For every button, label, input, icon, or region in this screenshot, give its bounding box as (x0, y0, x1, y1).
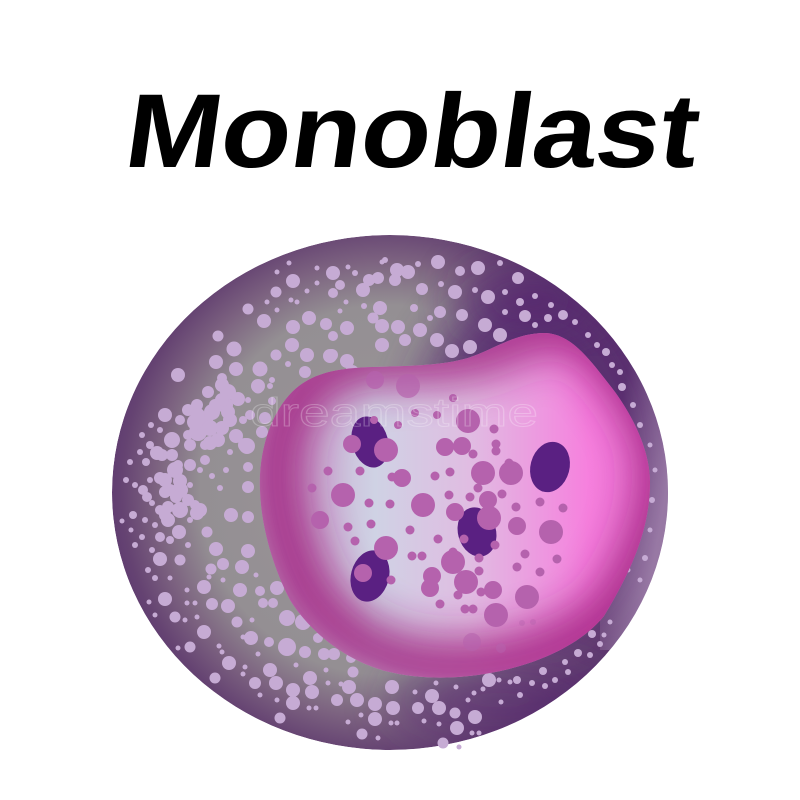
infographic canvas (112, 90, 700, 750)
nucleus (260, 323, 666, 678)
nucleoli (345, 412, 575, 606)
nuclear granules (308, 371, 568, 653)
watermark: dreamstime (250, 391, 538, 435)
cell: monoblast (112, 235, 670, 750)
title: Monoblast (119, 72, 707, 190)
cytoplasm granules (120, 255, 658, 750)
cytoplasm (112, 235, 670, 750)
